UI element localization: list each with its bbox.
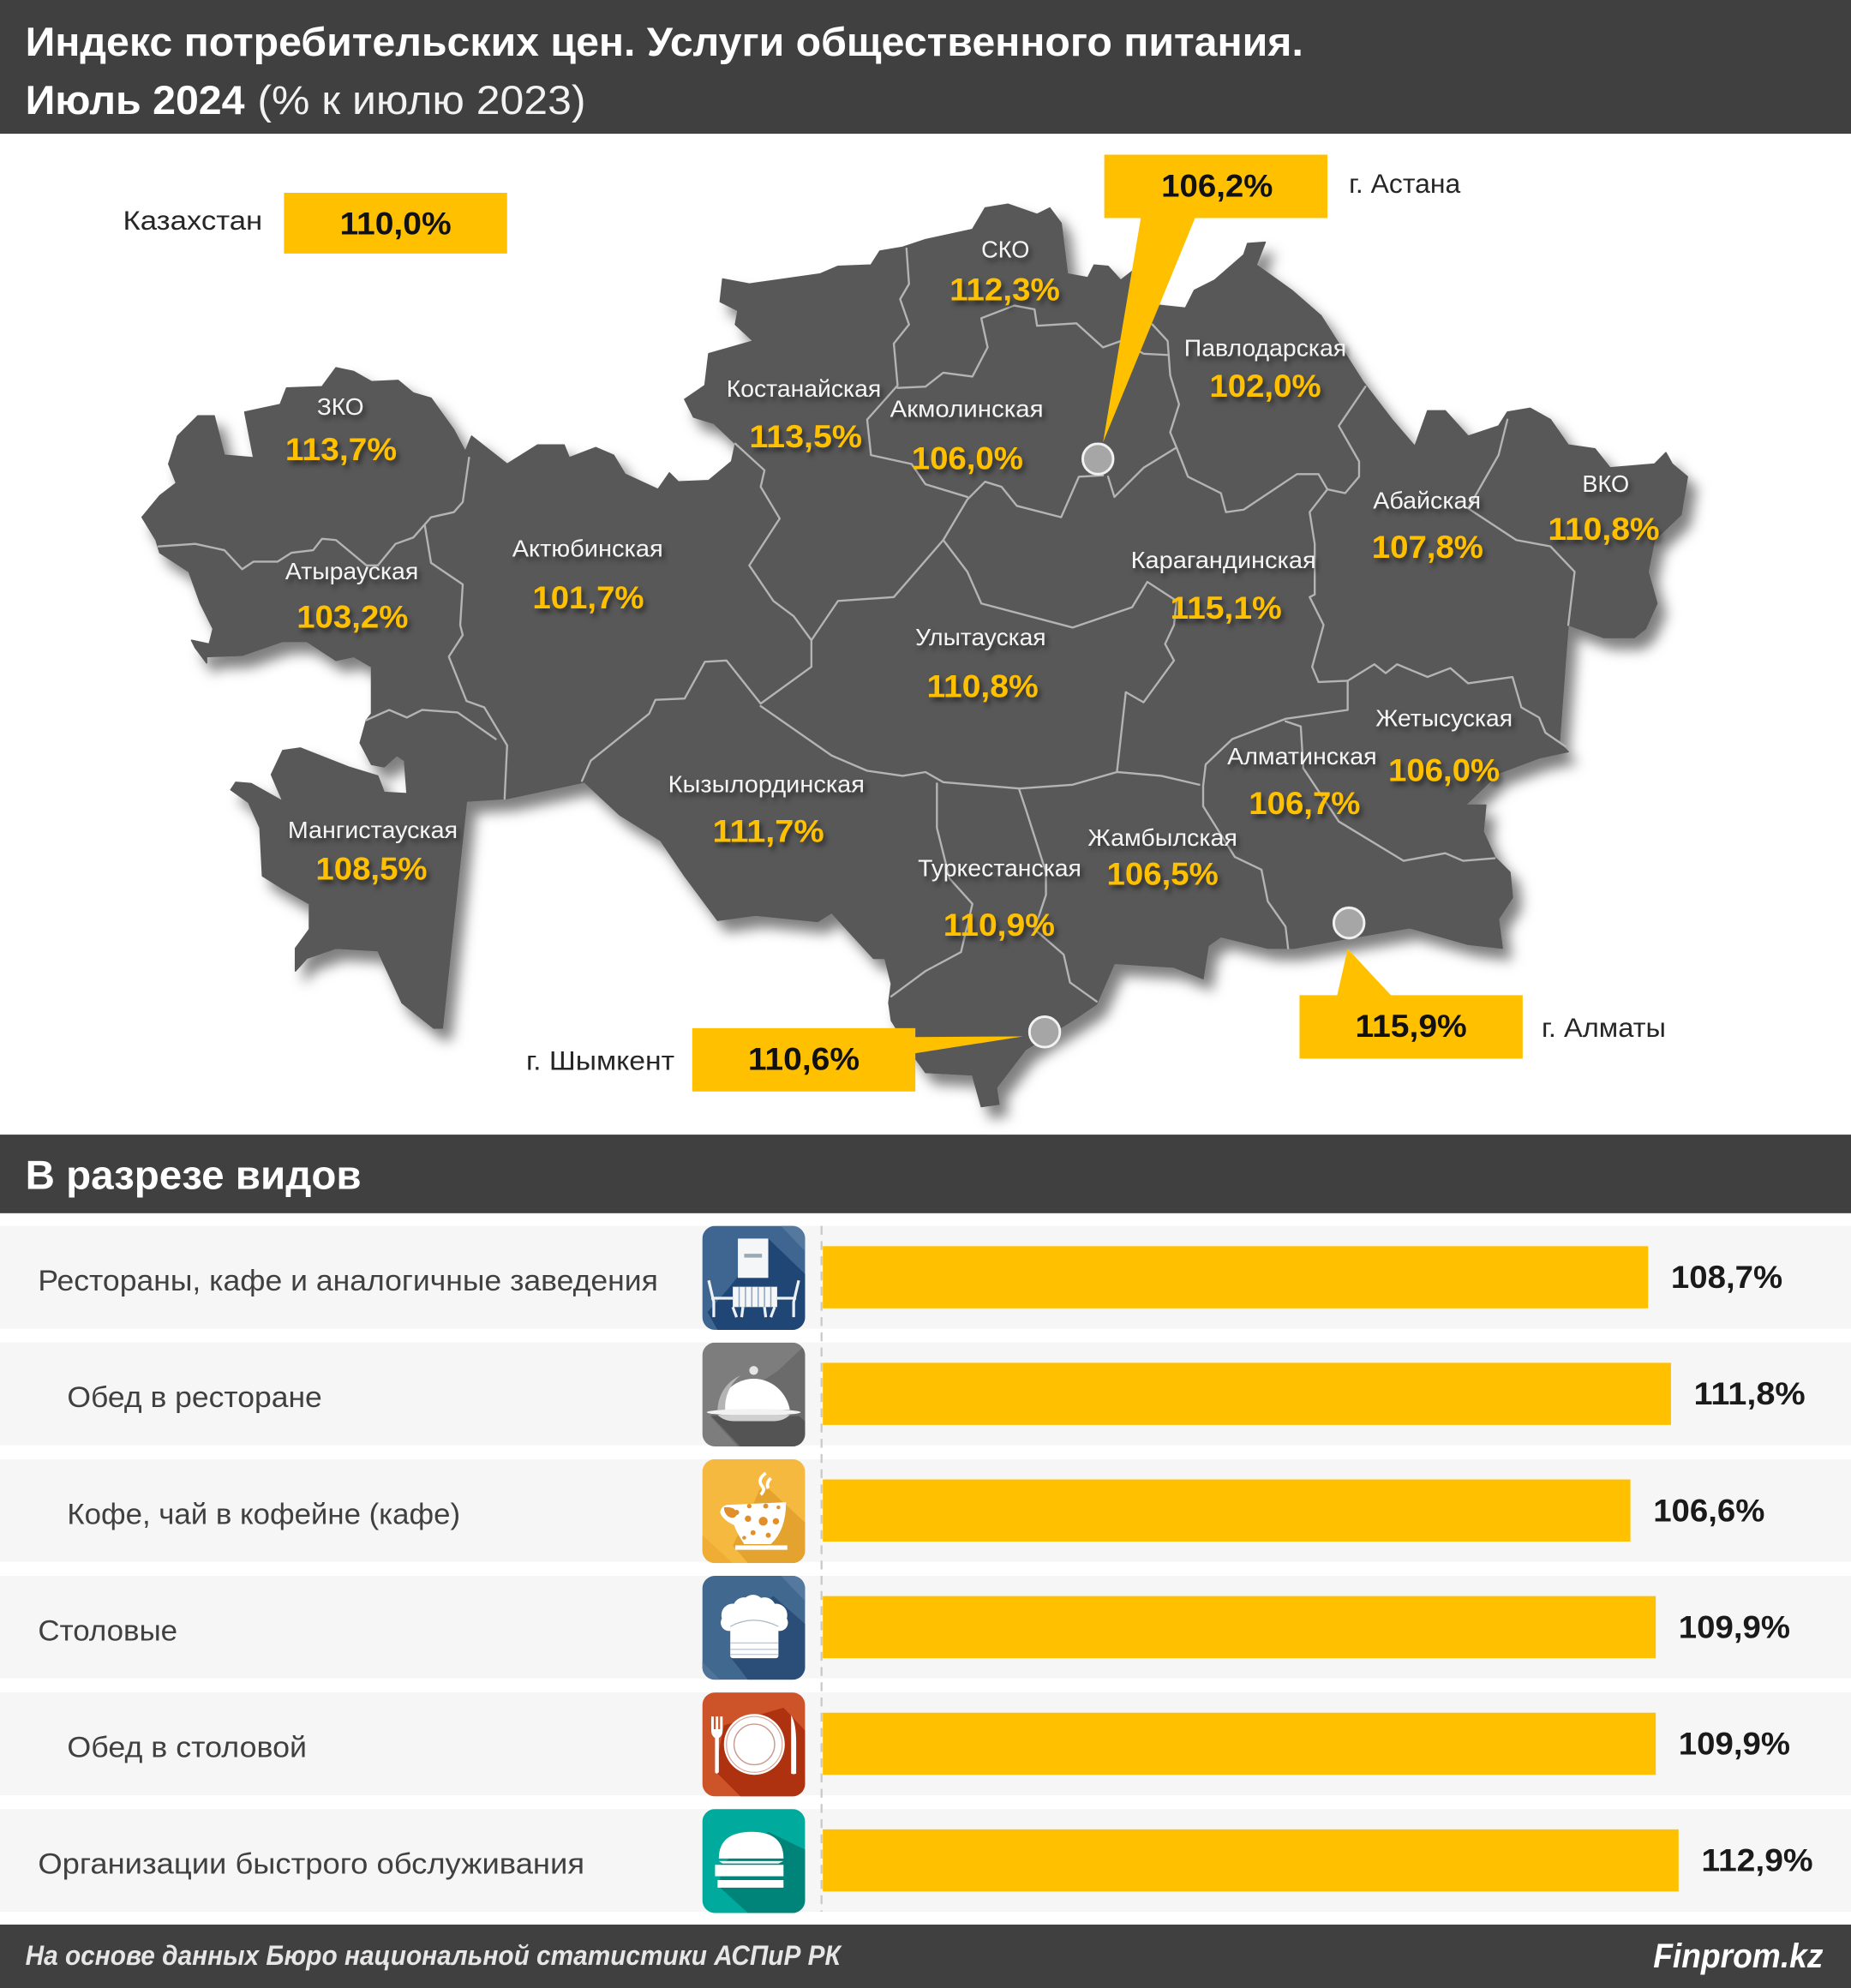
section heading bar xyxy=(0,1135,1851,1213)
region names: Павлодарская xyxy=(1184,335,1346,362)
region values: 106,0% xyxy=(912,440,1023,476)
row: fast food: 112,9% xyxy=(1701,1843,1813,1878)
region names: Кызылординская xyxy=(668,771,865,798)
region names: Улытауская xyxy=(915,624,1046,650)
callout: Astana: г. Астана xyxy=(1349,169,1461,199)
row: canteens xyxy=(38,1596,1790,1658)
region values xyxy=(285,272,1660,943)
callout: Almaty: г. Алматы xyxy=(1542,1013,1666,1043)
region values: 107,8% xyxy=(1372,530,1483,565)
row 3 background xyxy=(0,1459,1851,1562)
region values: 111,7% xyxy=(712,813,824,848)
region names: Карагандинская xyxy=(1131,547,1316,573)
region names xyxy=(285,236,1629,881)
row: restaurants: 108,7% xyxy=(1671,1260,1782,1295)
row: fast food: Организации быстрого обслуживания xyxy=(38,1848,584,1881)
region values: 103,2% xyxy=(297,599,408,634)
region names: Жамбылская xyxy=(1087,824,1237,851)
row 4 background xyxy=(0,1576,1851,1679)
region names: ЗКО xyxy=(317,393,364,420)
region values: 112,3% xyxy=(949,272,1060,308)
icon: cloche xyxy=(703,1343,805,1446)
row: coffee xyxy=(67,1480,1764,1542)
icon: plate and cutlery xyxy=(703,1692,805,1796)
row: canteen lunch xyxy=(67,1713,1790,1775)
row: coffee: Кофе, чай в кофейне (кафе) xyxy=(67,1498,460,1530)
region names: Мангистауская xyxy=(288,817,458,843)
region names: СКО xyxy=(981,236,1029,262)
region values: 106,7% xyxy=(1249,786,1360,821)
region names: Туркестанская xyxy=(918,854,1081,881)
row: restaurants xyxy=(38,1246,1782,1308)
region values: 101,7% xyxy=(532,580,644,615)
callout: Kazakhstan xyxy=(123,193,507,254)
region names: Алматинская xyxy=(1227,743,1377,769)
row: restaurant lunch xyxy=(67,1362,1806,1425)
callout: Shymkent: 110,6% xyxy=(748,1042,860,1077)
row: restaurant lunch: 111,8% xyxy=(1694,1376,1806,1411)
row: canteens: 109,9% xyxy=(1679,1609,1790,1644)
icon: burger xyxy=(703,1809,805,1913)
row: canteen lunch: 109,9% xyxy=(1679,1727,1790,1762)
region values: 110,9% xyxy=(943,907,1055,943)
callout: Astana xyxy=(1082,154,1461,474)
region values: 113,7% xyxy=(285,432,397,467)
row: restaurants: Рестораны, кафе и аналогичные заведения xyxy=(38,1265,658,1297)
region values: 110,8% xyxy=(926,669,1039,704)
footer brand: Finprom.kz xyxy=(1653,1937,1823,1975)
title line 1: Индекс потребительских цен. Услуги общественного питания. xyxy=(26,20,1303,65)
icon: coffee cup xyxy=(703,1459,805,1563)
title line 2: (% к июлю 2023) xyxy=(257,78,586,123)
row 5 background xyxy=(0,1692,1851,1795)
region names: Акмолинская xyxy=(890,396,1044,422)
region names: Абайская xyxy=(1373,487,1481,513)
region names: Актюбинская xyxy=(512,535,663,561)
footer source: На основе данных Бюро национальной статистики АСПиР РК xyxy=(26,1940,842,1971)
row: restaurant lunch: Обед в ресторане xyxy=(67,1381,322,1414)
row: fast food xyxy=(38,1829,1813,1891)
region values: 102,0% xyxy=(1209,368,1321,404)
row 1 background xyxy=(0,1226,1851,1328)
callout: Kazakhstan: 110,0% xyxy=(339,207,452,242)
callout: Almaty: 115,9% xyxy=(1356,1009,1467,1044)
map of Kazakhstan xyxy=(142,204,1687,1107)
footer bar xyxy=(0,1925,1851,1988)
callout: Astana: 106,2% xyxy=(1161,168,1273,203)
region names: Атырауская xyxy=(285,558,418,584)
region borders xyxy=(159,248,1574,1002)
region names: Жетысуская xyxy=(1375,705,1513,732)
map silhouette xyxy=(142,204,1687,1107)
region values: 106,5% xyxy=(1107,857,1219,892)
callout: Shymkent: г. Шымкент xyxy=(526,1046,674,1076)
region values: 106,0% xyxy=(1388,752,1500,787)
region values: 110,8% xyxy=(1548,512,1660,547)
icon: restaurant table xyxy=(703,1226,805,1330)
title line 2: Июль 2024 xyxy=(26,78,245,123)
row: canteen lunch: Обед в столовой xyxy=(67,1732,307,1764)
row 6 background xyxy=(0,1809,1851,1912)
region values: 113,5% xyxy=(749,419,862,454)
row: canteens: Столовые xyxy=(38,1614,177,1647)
header: title bar xyxy=(0,0,1851,134)
section heading bar: В разрезе видов xyxy=(26,1153,362,1199)
callout: Kazakhstan: Казахстан xyxy=(123,206,262,236)
region values: 108,5% xyxy=(315,852,428,887)
region names: Костанайская xyxy=(727,375,881,402)
region names: ВКО xyxy=(1582,470,1629,497)
icon: chef hat xyxy=(703,1576,805,1680)
title line 2 xyxy=(26,78,586,123)
callout: Shymkent xyxy=(526,1017,1060,1092)
bar chart: by type xyxy=(0,1226,1851,1913)
region values: 115,1% xyxy=(1171,590,1282,626)
callout: Almaty xyxy=(1299,907,1666,1058)
row: coffee: 106,6% xyxy=(1653,1493,1764,1528)
row 2 background xyxy=(0,1343,1851,1446)
